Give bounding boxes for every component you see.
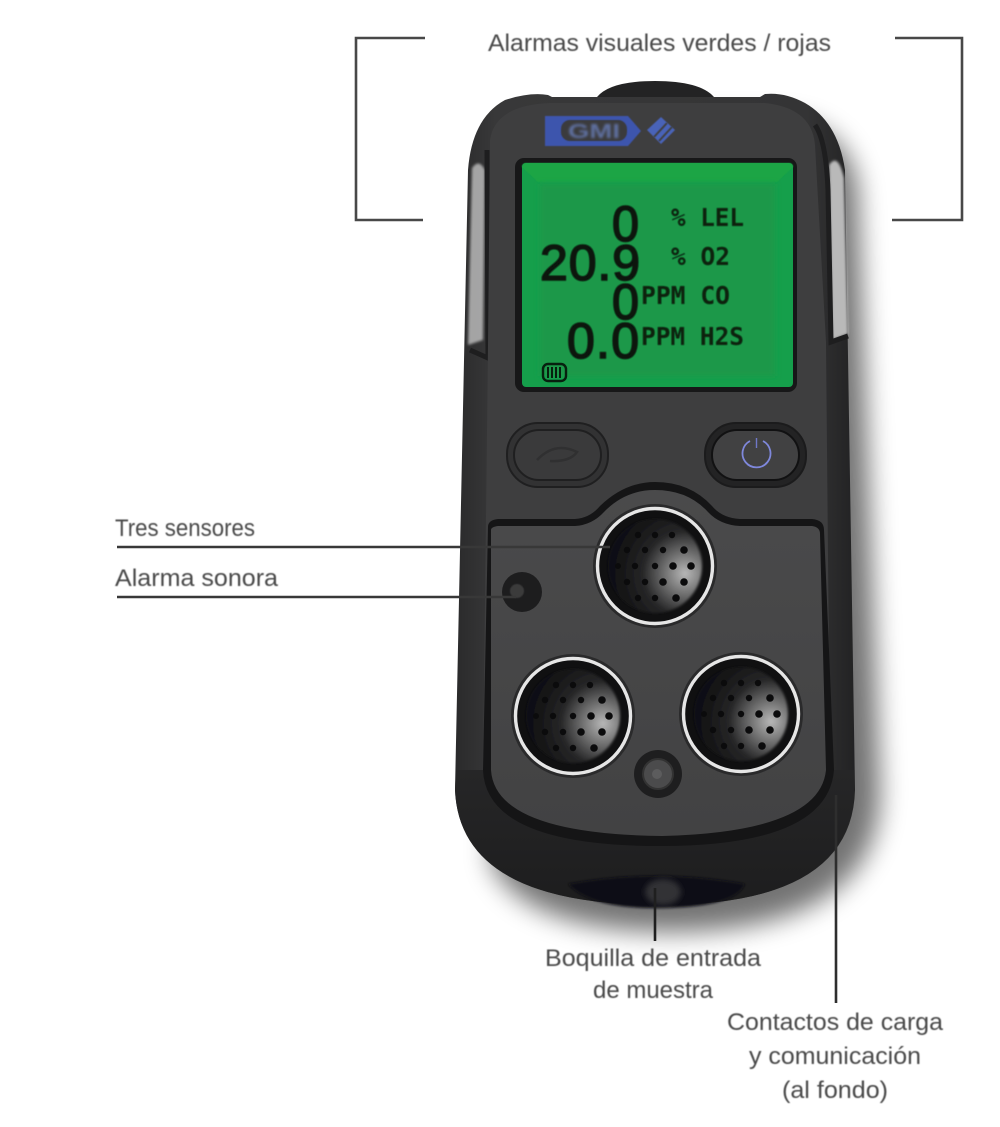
display inner [540, 184, 775, 376]
label: visual alarms [356, 30, 962, 220]
reading: O2: 20.9 [540, 235, 640, 291]
button: power [705, 423, 806, 487]
label: charging contacts: y comunicación [749, 1043, 921, 1070]
side band: left [470, 150, 488, 358]
bottom nozzle [568, 876, 745, 908]
lower rim [455, 770, 854, 905]
reading: CO: 0 [612, 274, 639, 330]
small port [634, 750, 682, 798]
display bezel [515, 158, 797, 392]
text: Boquilla de entrada [545, 945, 762, 972]
logo badge [545, 116, 641, 146]
sensor: right [679, 652, 803, 776]
sounder [502, 572, 542, 612]
side strip: right [829, 161, 848, 340]
port center [652, 769, 662, 779]
unit: CO: PPM CO [641, 281, 730, 310]
logo diamond [647, 117, 675, 144]
text: Tres sensores [115, 515, 255, 542]
panel face [491, 490, 826, 836]
panel border [483, 482, 834, 846]
diamond stripes [654, 123, 672, 141]
logo [545, 116, 675, 146]
button rim [705, 423, 806, 487]
device body [455, 94, 855, 905]
sensor panel [483, 482, 834, 846]
reading: H2S: 0.0 [567, 313, 639, 369]
button: left [507, 423, 608, 487]
logo text: GMI [568, 121, 620, 143]
button rim [507, 423, 608, 487]
leader line [654, 888, 656, 941]
inner front face [483, 103, 830, 770]
leader line [835, 795, 837, 1003]
label: charging contacts [727, 795, 944, 1104]
display glass [522, 163, 793, 387]
text: Alarma sonora [115, 565, 279, 592]
text: visual alarms: Alarmas visuales verdes / rojas [488, 30, 831, 57]
bracket: left [356, 38, 425, 220]
side band: right [815, 125, 848, 342]
logo letters [561, 120, 627, 141]
label: charging contacts: (al fondo) [782, 1077, 888, 1104]
button arrow [537, 448, 577, 461]
sensor: top [593, 504, 717, 628]
device [455, 81, 880, 932]
sensor: left [511, 654, 635, 778]
leader line [117, 546, 610, 548]
top cap [597, 81, 714, 97]
unit: H2S: PPM H2S [641, 322, 744, 351]
label: sample inlet [545, 888, 762, 1004]
sounder highlight [510, 584, 524, 598]
button top [514, 430, 601, 480]
side strip: left [468, 163, 485, 345]
unit: LEL: % LEL [671, 203, 744, 232]
power icon [742, 441, 770, 467]
nozzle highlight [645, 879, 681, 905]
port inner [643, 759, 673, 789]
display top band [522, 163, 793, 182]
reading: LEL: 0 [612, 196, 639, 252]
text: Contactos de carga [727, 1009, 944, 1036]
device shadow [490, 120, 880, 932]
button top [712, 430, 799, 480]
display [515, 158, 797, 392]
unit: O2: % O2 [671, 242, 730, 271]
battery icon [543, 364, 566, 381]
label: sample inlet: de muestra [593, 977, 714, 1004]
bracket: right [892, 38, 962, 220]
leader line [117, 596, 516, 598]
